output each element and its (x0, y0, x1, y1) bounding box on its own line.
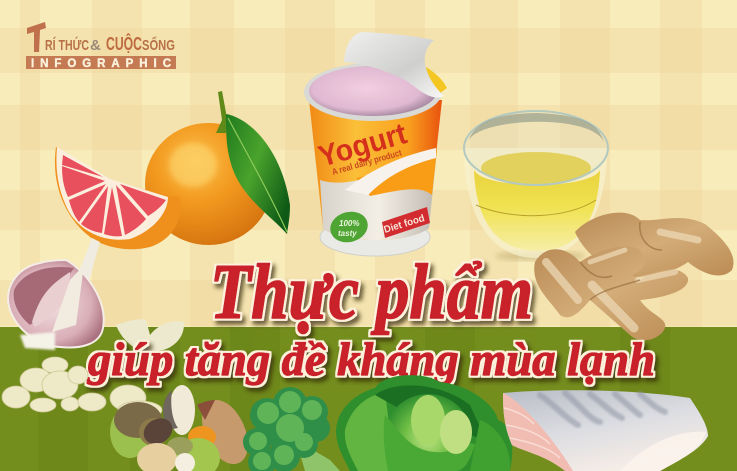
cup body (309, 100, 442, 240)
garlic cloves (116, 319, 184, 352)
icon: ginger root (534, 213, 733, 340)
title line 1: Thực phẩm (210, 248, 533, 335)
icon: garlic slices (2, 357, 162, 419)
icon: orange with leaf (145, 91, 290, 245)
cup rim and pink yogurt (304, 63, 442, 121)
title (87, 248, 655, 386)
logo: Tri thức & Cuộc sống Infographic: CUỘC (106, 33, 142, 54)
icon: fish fillet (503, 390, 708, 471)
icon: glass bowl of honey lemon drink (464, 111, 608, 261)
background: green band (0, 327, 737, 471)
logo: Tri thức & Cuộc sống Infographic: & (90, 37, 101, 54)
yogurt label: Yogurt (315, 117, 410, 174)
icon: cabbage (336, 375, 512, 471)
cup base (320, 218, 430, 256)
title line 2: giúp tăng đề kháng mùa lạnh (87, 334, 655, 386)
icon: yogurt cup: 100% (339, 219, 359, 228)
icon: yogurt cup: A real dairy product (331, 147, 403, 177)
icon: broccoli (243, 387, 340, 471)
logo: Tri thức & Cuộc sống Infographic: INFOGRAPHIC (31, 58, 171, 70)
icon: beans and mushrooms (110, 385, 257, 471)
icon: yogurt cup: tasty (338, 229, 357, 238)
peeled lid (422, 65, 447, 93)
icon: yogurt cup (304, 32, 447, 256)
logo: Tri thức & Cuộc sống Infographic: RÍ THỨC (45, 36, 89, 54)
logo: Tri thức & Cuộc sống Infographic (26, 22, 176, 70)
icon: grapefruit wedge (55, 147, 181, 249)
icon: yogurt cup: Diet food (383, 213, 426, 236)
logo: Tri thức & Cuộc sống Infographic: SỐNG (142, 36, 175, 54)
icon: garlic bulb (8, 238, 184, 352)
